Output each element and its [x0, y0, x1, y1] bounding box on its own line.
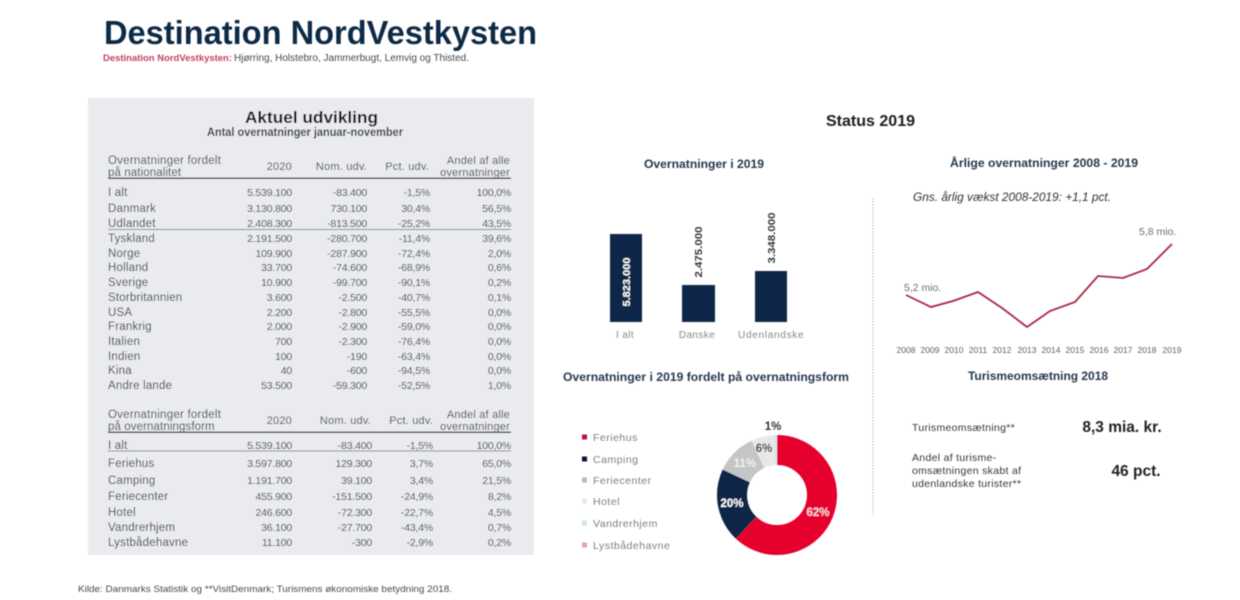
table rows: accommodation type: 4,5%: [488, 507, 511, 519]
table rows: accommodation type: 36.100: [261, 522, 292, 534]
table header: nationality: på nationalitet: [108, 167, 182, 179]
legend: Camping: [593, 454, 639, 466]
table rows: nationality: 0,2%: [488, 277, 511, 289]
table header: nationality: Nom. udv.: [316, 161, 367, 173]
table rows: accommodation type: -151.500: [332, 491, 372, 503]
end label: 5,8 mio.: [1139, 226, 1176, 238]
year axis: [897, 345, 1182, 355]
table rows: accommodation type: Camping: [108, 475, 155, 487]
table rows: accommodation type: -27.700: [338, 522, 372, 534]
table rows: nationality: -63,4%: [398, 351, 430, 363]
table rows: nationality: -2.900: [338, 321, 367, 333]
table rows: nationality: -59.300: [333, 380, 367, 392]
year axis: 2010: [945, 345, 964, 355]
year axis: 2009: [921, 345, 940, 355]
table rows: accommodation type: Feriehus: [108, 458, 154, 470]
donut labels: 11%: [734, 458, 756, 470]
year axis: 2017: [1114, 345, 1133, 355]
year axis: 2016: [1090, 345, 1109, 355]
subtitle: member municipalities: Destination NordVestkysten:: [103, 53, 232, 63]
bar: Danske: 2.475.000: [693, 226, 705, 278]
chart heading: Overnatninger i 2019: [644, 157, 764, 171]
metric: foreign share: 46 pct.: [1111, 463, 1161, 480]
table rows: nationality: Tyskland: [108, 233, 155, 245]
line chart: årlige overnatninger: [897, 155, 1182, 355]
table rows: accommodation type: Vandrerhjem: [108, 522, 175, 534]
table rows: nationality: Storbritannien: [108, 292, 182, 304]
bar: Udenlandske: [738, 212, 804, 341]
bar: Udenlandske: 3.348.000: [766, 212, 778, 264]
table rows: nationality: 5.539.100: [247, 187, 292, 199]
legend: [582, 432, 670, 552]
table rows: nationality: Udlandet: [108, 218, 156, 230]
donut chart section: overnatningsform: [563, 370, 849, 552]
heading: status 2019: Status 2019: [826, 113, 915, 130]
table rows: accommodation type: [108, 440, 511, 549]
bar chart: overnatninger i 2019: [610, 157, 804, 341]
metric: turnover: 8,3 mia. kr.: [1082, 419, 1162, 436]
table rows: accommodation type: -22,7%: [401, 507, 433, 519]
legend: Feriecenter: [593, 475, 652, 487]
table rows: nationality: 0,6%: [488, 262, 511, 274]
table rows: accommodation type: Feriecenter: [108, 491, 168, 503]
year axis: 2015: [1066, 345, 1085, 355]
divider: [872, 198, 874, 515]
bar: Danske: [679, 226, 715, 341]
table rows: nationality: -2.300: [338, 336, 367, 348]
metric: foreign share: [912, 452, 1161, 490]
tourism revenue section: [912, 369, 1162, 490]
table rows: accommodation type: 455.900: [255, 491, 292, 503]
metric: turnover: Turismeomsætning**: [912, 422, 1015, 434]
table rows: accommodation type: -300: [352, 537, 372, 549]
table header: accommodation type: overnatninger: [440, 421, 510, 433]
table rows: nationality: 40: [281, 365, 292, 377]
table rows: nationality: 2.200: [267, 307, 292, 319]
bar: Udenlandske: Udenlandske: [738, 330, 804, 341]
table rows: accommodation type: 0,2%: [488, 537, 511, 549]
table rows: nationality: 0,0%: [488, 321, 511, 333]
table rows: nationality: -76,4%: [398, 336, 430, 348]
subtitle: member municipalities: Hjørring, Holstebro, Jammerbugt, Lemvig og Thisted.: [234, 53, 469, 64]
table rows: accommodation type: 246.600: [255, 507, 292, 519]
table rows: nationality: Danmark: [108, 203, 156, 215]
table rows: nationality: USA: [108, 307, 132, 319]
table rows: accommodation type: Lystbådehavne: [108, 537, 188, 549]
bar: I alt: 5.823.000: [621, 257, 633, 306]
table rows: nationality: Sverige: [108, 277, 148, 289]
legend: Lystbådehavne: [593, 540, 670, 552]
legend: Feriehus: [593, 432, 638, 444]
table rows: nationality: 2.191.500: [247, 233, 292, 245]
table rows: nationality: I alt: [108, 187, 128, 199]
table rows: nationality: Kina: [108, 365, 132, 377]
table rows: nationality: -813.500: [327, 218, 367, 230]
table rows: nationality: Indien: [108, 351, 141, 363]
table rows: nationality: 1,0%: [488, 380, 511, 392]
table rows: accommodation type: -72.300: [338, 507, 372, 519]
growth note: Gns. årlig vækst 2008-2019: +1,1 pct.: [913, 190, 1111, 204]
table rows: nationality: -2.800: [338, 307, 367, 319]
table rows: nationality: 56,5%: [482, 203, 511, 215]
table rows: accommodation type: 5.539.100: [247, 440, 292, 452]
table rows: accommodation type: -2,9%: [407, 537, 433, 549]
table rows: nationality: -25,2%: [398, 218, 430, 230]
table rows: nationality: 0,0%: [488, 365, 511, 377]
table rows: accommodation type: 3,4%: [410, 475, 433, 487]
table rows: accommodation type: I alt: [108, 440, 128, 452]
table header: nationality: Andel af alle: [447, 155, 510, 167]
table rows: accommodation type: 11.100: [262, 537, 292, 549]
year axis: 2018: [1138, 345, 1157, 355]
table rows: nationality: 2.408.300: [247, 218, 292, 230]
metric: foreign share: Andel af turisme-: [912, 452, 997, 464]
metric: turnover: [912, 419, 1162, 436]
donut labels: 20%: [720, 498, 744, 510]
subtitle: member municipalities: [103, 53, 469, 64]
table rows: nationality: 39,6%: [482, 233, 511, 245]
table rows: nationality: 0,0%: [488, 307, 511, 319]
table rows: nationality: -40,7%: [398, 292, 430, 304]
bar: Danske: Danske: [679, 330, 715, 341]
table header: accommodation type: Andel af alle: [447, 409, 510, 421]
section heading: Turismeomsætning 2018: [968, 369, 1108, 383]
metric: foreign share: udenlandske turister**: [912, 478, 1021, 490]
table rows: nationality: [108, 187, 511, 392]
table rows: nationality: -74.600: [333, 262, 367, 274]
table rows: nationality: 2,0%: [488, 248, 511, 260]
year axis: 2008: [897, 345, 916, 355]
table rows: accommodation type: -83.400: [338, 440, 372, 452]
table rows: nationality: -59,0%: [398, 321, 430, 333]
donut labels: 62%: [806, 507, 830, 519]
table rows: nationality: 100: [275, 351, 292, 363]
table rows: nationality: 33.700: [261, 262, 292, 274]
year axis: 2011: [969, 345, 987, 355]
donut labels: 6%: [756, 443, 772, 455]
table header: accommodation type: [108, 409, 511, 433]
start label: 5,2 mio.: [904, 282, 941, 294]
table rows: nationality: 100,0%: [477, 187, 511, 199]
table rows: nationality: 53.500: [261, 380, 292, 392]
title: Destination NordVestkysten: [104, 14, 537, 51]
trend line: [906, 244, 1172, 327]
table rows: nationality: -287.900: [327, 248, 367, 260]
table rows: nationality: 2.000: [267, 321, 292, 333]
table rows: accommodation type: 3,7%: [410, 458, 433, 470]
panel: aktuel udvikling table: [88, 98, 534, 555]
table header: nationality: Overnatninger fordelt: [108, 155, 222, 167]
table rows: nationality: 30,4%: [401, 203, 430, 215]
table header: nationality: overnatninger: [440, 167, 510, 179]
table rows: nationality: Frankrig: [108, 321, 152, 333]
year axis: 2014: [1042, 345, 1061, 355]
table rows: nationality: -72,4%: [398, 248, 430, 260]
table rows: nationality: -83.400: [333, 187, 367, 199]
table rows: nationality: -2.500: [338, 292, 367, 304]
table rows: nationality: Holland: [108, 262, 148, 274]
legend: Hotel: [593, 496, 620, 508]
table header: accommodation type: Nom. udv.: [320, 415, 371, 427]
chart heading: Årlige overnatninger 2008 - 2019: [950, 155, 1138, 170]
panel subheading: Antal overnatninger januar-november: [207, 127, 404, 139]
table rows: nationality: Andre lande: [108, 380, 172, 392]
table rows: nationality: 700: [275, 336, 292, 348]
table rows: accommodation type: 1.191.700: [247, 475, 292, 487]
table rows: nationality: -280.700: [327, 233, 367, 245]
table rows: accommodation type: 100,0%: [477, 440, 511, 452]
table header: accommodation type: Pct. udv.: [389, 415, 433, 427]
table rows: nationality: -99.700: [333, 277, 367, 289]
table rows: nationality: Norge: [108, 248, 140, 260]
table rows: accommodation type: 39.100: [341, 475, 372, 487]
table rows: accommodation type: -1,5%: [407, 440, 433, 452]
table rows: nationality: 0,0%: [488, 336, 511, 348]
table rows: nationality: -68,9%: [398, 262, 430, 274]
table header: nationality: Pct. udv.: [385, 161, 429, 173]
chart heading: Overnatninger i 2019 fordelt på overnatningsform: [563, 370, 849, 384]
table rows: accommodation type: 0,7%: [488, 522, 511, 534]
table header: nationality: 2020: [267, 161, 292, 173]
table rows: nationality: -94,5%: [398, 365, 430, 377]
year axis: 2013: [1018, 345, 1037, 355]
table rows: accommodation type: 8,2%: [488, 491, 511, 503]
metric: foreign share: omsætningen skabt af: [912, 465, 1021, 477]
table rows: accommodation type: 65,0%: [482, 458, 511, 470]
table rows: nationality: 43,5%: [482, 218, 511, 230]
table rows: nationality: -1,5%: [404, 187, 430, 199]
source footnote: Kilde: Danmarks Statistik og **VisitDenmark; Turismens økonomiske betydning 2018.: [78, 584, 452, 595]
table rows: nationality: -190: [347, 351, 367, 363]
donut labels: 1%: [765, 421, 781, 433]
legend: Vandrerhjem: [593, 518, 658, 530]
donut labels: [720, 421, 830, 519]
table rows: nationality: -55,5%: [398, 307, 430, 319]
panel heading: Aktuel udvikling: [245, 108, 378, 127]
table header: accommodation type: Overnatninger fordelt: [108, 409, 222, 421]
table rows: accommodation type: Hotel: [108, 507, 136, 519]
year axis: 2012: [993, 345, 1012, 355]
table rows: nationality: Italien: [108, 336, 140, 348]
table rows: accommodation type: -24,9%: [401, 491, 433, 503]
table rows: nationality: 3.600: [267, 292, 292, 304]
table rows: nationality: 0,1%: [488, 292, 511, 304]
year axis: 2019: [1163, 345, 1182, 355]
table header: accommodation type: 2020: [267, 415, 292, 427]
donut: [732, 450, 822, 540]
table rows: accommodation type: 129.300: [335, 458, 372, 470]
table rows: nationality: 3.130.800: [247, 203, 292, 215]
table rows: nationality: 730.100: [330, 203, 367, 215]
table header: nationality: [108, 155, 511, 179]
table rows: nationality: 0,0%: [488, 351, 511, 363]
table rows: nationality: -52,5%: [398, 380, 430, 392]
bar: I alt: [610, 234, 642, 341]
table header: accommodation type: på overnatningsform: [108, 421, 215, 433]
bar: I alt: I alt: [616, 330, 634, 341]
table rows: nationality: 109.900: [255, 248, 292, 260]
table rows: nationality: -600: [347, 365, 367, 377]
table rows: accommodation type: -43,4%: [401, 522, 433, 534]
table rows: nationality: 10.900: [261, 277, 292, 289]
table rows: nationality: -90,1%: [398, 277, 430, 289]
table rows: nationality: -11,4%: [399, 233, 430, 245]
table rows: accommodation type: 3.597.800: [247, 458, 292, 470]
table rows: accommodation type: 21,5%: [482, 475, 511, 487]
